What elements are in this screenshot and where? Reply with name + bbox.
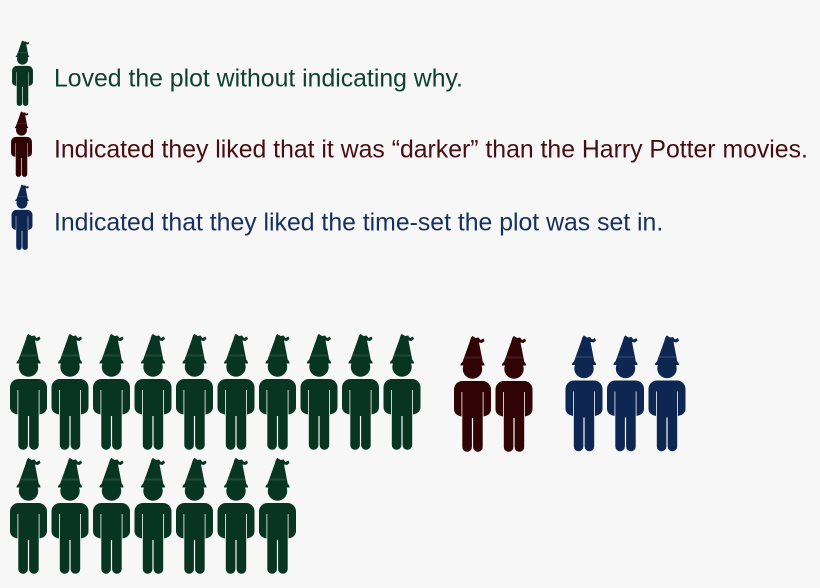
legend text: time-set: Indicated that they liked the time-set the plot was set in. bbox=[54, 210, 663, 236]
legend icon: blue wizard bbox=[12, 184, 32, 250]
legend bbox=[11, 40, 808, 250]
legend text: darker: Indicated they liked that it was “darker” than the Harry Potter movies. bbox=[54, 136, 808, 164]
legend icon: red wizard bbox=[11, 112, 32, 177]
green wizard figures bbox=[10, 334, 420, 574]
blue wizard figures bbox=[566, 336, 686, 451]
red wizard figures bbox=[454, 336, 532, 452]
legend text: loved the plot: Loved the plot without indicating why. bbox=[54, 66, 463, 92]
legend icon: green wizard bbox=[12, 40, 33, 106]
